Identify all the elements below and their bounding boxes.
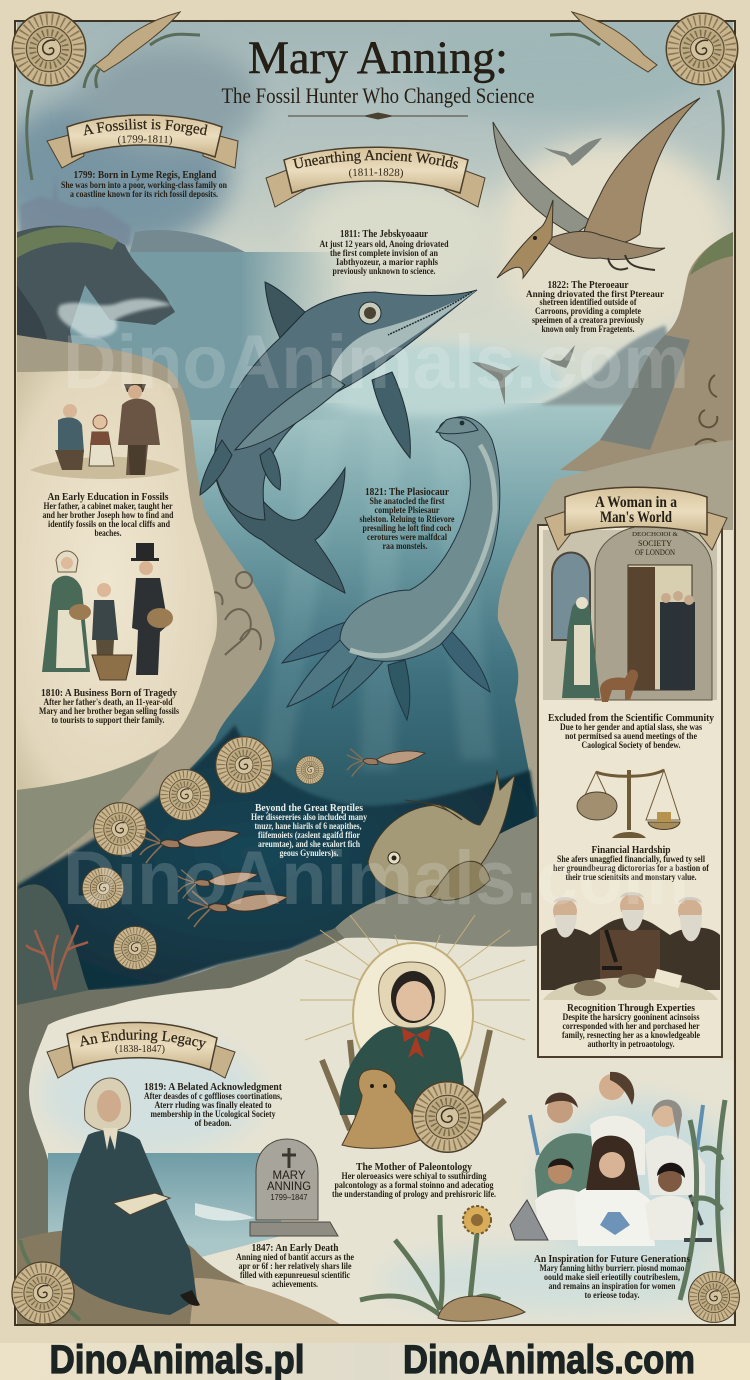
text: 1821 plesiosaur: 1821: The Plasiocaur: [365, 486, 449, 498]
father with top hat: [131, 543, 173, 675]
seaweed coral: [26, 925, 88, 990]
pale haze above the water: [300, 344, 560, 416]
small pterosaurs: [472, 138, 602, 405]
ribbon: a woman in a man's world: Man's World: [600, 509, 672, 526]
bottom left sea: [48, 1153, 285, 1260]
strip right of panel: [720, 530, 733, 1060]
text: 1847 early death: 1847: An Early Death: [252, 1242, 338, 1254]
text: 1811 ichthyosaur: At just 12 years old, Anoing driovated: [320, 239, 449, 250]
ribbon: unearthing ancient worlds: (1811-1828): [349, 168, 403, 178]
cliff lower shade: [600, 335, 690, 450]
text: inspiration for future generations: An Inspiration for Future Generations: [534, 1253, 691, 1265]
microscope: [684, 1195, 712, 1240]
text: financial hardship: Financial Hardship: [592, 844, 670, 856]
cliff grass: [690, 232, 733, 275]
text: beyond the great reptiles: fiifemoiets (zaslent agaifd ffior: [258, 830, 361, 841]
lower cream field: [17, 930, 733, 1324]
text: 1821 plesiosaur: presniling he loft find coch: [362, 523, 452, 534]
text: belated acknowledgment: [144, 1081, 282, 1129]
text: 1811 ichthyosaur: the first complete invision of an: [330, 248, 439, 259]
father: [118, 384, 160, 475]
laptop: [510, 1200, 548, 1240]
seabed rock: [335, 815, 545, 947]
text: financial hardship: her groundbeurag dictororias for a bastion of: [553, 863, 710, 874]
text: belated acknowledgment: After deasdes of c gofflioses coortinations,: [144, 1091, 282, 1102]
pterosaur: [493, 98, 700, 278]
text: mother of paleontology: palcontology as a formal stoinno and adecatiog: [334, 1180, 494, 1191]
society sign: OF LONDON: [635, 548, 675, 557]
ribbon: a woman in a man's world: [545, 487, 727, 550]
sky: [17, 22, 733, 442]
sand: [190, 1278, 340, 1324]
rock fossil carvings: [214, 571, 262, 656]
geological society scene: [543, 525, 717, 702]
distant headland left: [130, 230, 245, 252]
plants and flower: [20, 1100, 725, 1321]
fossil basket: [92, 655, 132, 680]
left rock band: [17, 335, 275, 915]
text: born in Lyme Regis: [61, 169, 228, 200]
beach ground: [30, 457, 180, 479]
left cream panel: [17, 371, 217, 790]
merchant family figures: [42, 543, 173, 680]
text: beyond the great reptiles: [251, 802, 367, 859]
sea and underwater gradient: [190, 403, 624, 930]
society sign: SOCIETY: [638, 539, 672, 548]
left sea: [240, 252, 338, 420]
text: recognition through experties: Recognition Through Experties: [567, 1002, 696, 1014]
distant town: [18, 192, 130, 246]
cliff grass: [17, 227, 118, 258]
ribbon: unearthing ancient worlds: Unearthing Ancient Worlds: [292, 150, 458, 169]
text: inspiration for future generations: Mary fanning hithy burrierr. piosnd momao: [540, 1263, 685, 1274]
society sign: [632, 531, 678, 557]
text: 1811 ichthyosaur: previously unknown to science.: [332, 266, 436, 277]
right cliff: [560, 232, 733, 480]
little girl: [89, 415, 114, 466]
sky clouds: [0, 25, 730, 340]
plesiosaur: [282, 417, 500, 720]
text: beyond the great reptiles: tnuzr, hane hiarils of 6 neapithes,: [254, 821, 362, 832]
society sign: DEOCHOIOI &: [632, 531, 678, 538]
open door: [628, 565, 692, 690]
ribbon: an enduring legacy: [46, 1022, 236, 1079]
text: belated acknowledgment: 1819: A Belated Acknowledgment: [144, 1081, 282, 1093]
fish Dapedium: [368, 770, 515, 900]
text: beyond the great reptiles: Beyond the Great Reptiles: [255, 802, 364, 814]
text: 1821 plesiosaur: cerotures were malfdcal: [367, 532, 447, 543]
ribbon: a fossilist is forged: A Fossilist is Forged: [84, 118, 208, 136]
fossil tools fan: [322, 1030, 505, 1130]
text: inspiration for future generations: [534, 1253, 691, 1301]
text: financial hardship: She afers unaggfied financially, fuwed ty sell: [557, 854, 705, 865]
prehistoric squids: [140, 748, 425, 927]
text: excluded from community: [548, 712, 714, 751]
text: belated acknowledgment: of beadon.: [194, 1118, 232, 1129]
text: early education: [42, 491, 174, 539]
bottom washes: [40, 1035, 260, 1155]
text: beyond the great reptiles: geous Gynulers)s.: [280, 848, 338, 859]
text: financial hardship: [553, 844, 710, 883]
text: early education: An Early Education in Fossils: [48, 491, 169, 503]
text: 1821 plesiosaur: raa monstels.: [382, 541, 428, 552]
text: 1822 pterosaur: shetreen identified outside of: [540, 297, 637, 308]
text: 1847 early death: achievements.: [272, 1279, 318, 1290]
back row: [535, 1093, 598, 1230]
subtitle: The Fossil Hunter Who Changed Science: [222, 83, 534, 108]
text: financial hardship: their true scienitsits and monstary value.: [566, 872, 696, 883]
shore rocks: [17, 1230, 246, 1324]
gravestone: 1799–1847: [270, 1192, 308, 1202]
text: inspiration for future generations: to erieose today.: [584, 1290, 640, 1301]
ribbon: unearthing ancient worlds: [265, 146, 486, 208]
text: mother of paleontology: the understanding of prology and prehisroric life.: [332, 1189, 496, 1200]
woman at door: [562, 602, 600, 698]
text: 1847 early death: Anning nied of bantit accurs as the: [236, 1252, 355, 1263]
ribbon: a fossilist is forged: [46, 114, 238, 169]
text: 1822 pterosaur: speeimen of a creatora previously: [532, 315, 644, 326]
text: 1821 plesiosaur: [360, 486, 455, 552]
bearded scientists: [541, 892, 720, 1000]
ribbon: a woman in a man's world: A Woman in a: [595, 494, 677, 511]
text: recognition through experties: Despite the harsicry gooninent acinsoiss: [562, 1012, 700, 1023]
text: mother of paleontology: Her oleroeasics were schiyal to ssuthirding: [342, 1171, 487, 1182]
women scientists: [510, 1072, 712, 1246]
text: early education: and her brother Joseph how to find and: [42, 510, 174, 521]
cliff fossils: [695, 375, 719, 445]
ichthyosaur: [200, 282, 477, 593]
text: mother of paleontology: [332, 1161, 496, 1200]
front row: [535, 1158, 590, 1240]
title: Mary Anning:: [248, 32, 508, 84]
text: business born of tragedy: 1810: A Business Born of Tragedy: [41, 687, 177, 699]
text: inspiration for future generations: oould make sieil erieotilly coutribeslem,: [544, 1272, 680, 1283]
gravestone: [250, 1139, 338, 1236]
text: recognition through experties: family, resnecting her as a knowledgeable: [562, 1030, 701, 1041]
divider ornament: [288, 113, 468, 119]
right rock: [498, 440, 733, 820]
bonnet: [379, 962, 445, 1028]
text: business born of tragedy: After her father's death, an 11-year-old: [44, 697, 173, 708]
text: belated acknowledgment: membership in the Ucological Society: [150, 1109, 276, 1120]
text: early education: Her father, a cabinet maker, taught her: [44, 501, 173, 512]
doorway arch: [595, 525, 712, 700]
lower left seaweed rock: [17, 750, 160, 885]
dog: [600, 670, 638, 702]
ribbon: an enduring legacy: (1838-1847): [115, 1043, 165, 1055]
son: [92, 583, 118, 672]
text: excluded from community: Excluded from the Scientific Community: [548, 712, 714, 724]
text: 1822 pterosaur: Anning driovated the first Ptereaur: [526, 289, 665, 300]
watermark top: DinoAnimals.com: [63, 320, 689, 405]
text: early education: identify fossils on the local cliffs and: [48, 519, 171, 530]
left cliffs: [17, 226, 175, 343]
text: 1847 early death: [236, 1242, 355, 1290]
elderly Mary seated: [60, 1078, 200, 1315]
text: 1821 plesiosaur: She anatocled the first: [370, 496, 445, 507]
watermark bottom: DinoAnimals.com: [63, 836, 689, 921]
text: 1821 plesiosaur: shelston. Reluing to Rtievore: [360, 514, 455, 525]
surf: [195, 1203, 255, 1221]
cave left rock: [17, 884, 90, 1010]
Mary Anning portrait: [300, 915, 530, 1152]
text: born in Lyme Regis: She was born into a poor, working-class family on: [61, 180, 228, 191]
rock arch band and trunk: [17, 928, 345, 1240]
light rays: [262, 507, 494, 770]
text: excluded from community: Due to her gender and aptial slass, she was: [560, 722, 702, 733]
text: business born of tragedy: [39, 687, 179, 726]
breaking waves: [58, 299, 172, 338]
text: 1822 pterosaur: Carroons, providing a complete: [535, 306, 642, 317]
text: 1821 plesiosaur: complete Plsiesaur: [374, 505, 440, 516]
text: 1822 pterosaur: known only from Fragetents.: [542, 324, 634, 335]
lower left cliff rocks: [17, 286, 47, 340]
dog: [342, 1069, 420, 1148]
text: mother of paleontology: The Mother of Paleontology: [356, 1161, 472, 1173]
ribbon: an enduring legacy: An Enduring Legacy: [80, 1029, 206, 1050]
right distant cliffs: [542, 324, 669, 406]
dark cave water: [17, 725, 540, 1010]
text: 1847 early death: filled with eæpunreuesul scientific: [240, 1270, 351, 1281]
gravestone: ANNING: [267, 1181, 311, 1193]
text: born in Lyme Regis: a coastline known for its rich fossil deposits.: [70, 189, 218, 200]
text: excluded from community: Caological Society of bendew.: [582, 740, 680, 751]
text: inspiration for future generations: and remains an inspiration for women: [548, 1281, 676, 1292]
text: belated acknowledgment: Aterr rluding was finally eleated to: [154, 1100, 272, 1111]
text: recognition through experties: authorlty in petroaotology.: [588, 1039, 674, 1050]
text: 1847 early death: apr or 6f : her relatively shars lile: [238, 1261, 352, 1272]
scales of justice icon: [577, 770, 680, 838]
text: recognition through experties: corresponded with her and porchased her: [562, 1021, 700, 1032]
children on the beach figures: [30, 384, 180, 479]
green dress: [339, 1024, 465, 1115]
glassware and gloves: [530, 1105, 703, 1155]
text: excluded from community: not permitsed sa auend meetings of the: [565, 731, 698, 742]
text: beyond the great reptiles: areumtae), and she exalort fich: [258, 839, 361, 850]
text: 1811 ichthyosaur: 1811: The Jebskyoaaur: [340, 228, 428, 240]
giant ammonite: [412, 1082, 483, 1152]
text: 1822 pterosaur: [526, 279, 665, 335]
right panel frame: [538, 525, 722, 1057]
text: business born of tragedy: to tourists to support their family.: [52, 715, 164, 726]
text: 1822 pterosaur: 1822: The Pteroeaur: [548, 279, 629, 291]
society men: [660, 602, 695, 690]
text: 1811 ichthyosaur: [320, 228, 449, 277]
ammonite fossils in the cave: [82, 737, 324, 970]
gravestone: MARY: [272, 1170, 306, 1182]
mother with basket: [42, 551, 91, 672]
text: recognition through experties: [562, 1002, 701, 1050]
text: beyond the great reptiles: Her dissereries also included many: [251, 812, 367, 823]
red bow: [402, 1028, 431, 1058]
text: business born of tragedy: Mary and her brother began selling fossils: [39, 706, 179, 717]
footer band: [0, 1338, 750, 1380]
text: 1811 ichthyosaur: Iabthyozeur, a marior raphls: [336, 257, 438, 268]
text: early education: beaches.: [94, 528, 122, 539]
window: [552, 552, 590, 640]
text: born in Lyme Regis: 1799: Born in Lyme Regis, England: [74, 169, 216, 181]
boy kneeling: [55, 404, 84, 470]
ribbon: a fossilist is forged: (1799-1811): [118, 135, 172, 146]
